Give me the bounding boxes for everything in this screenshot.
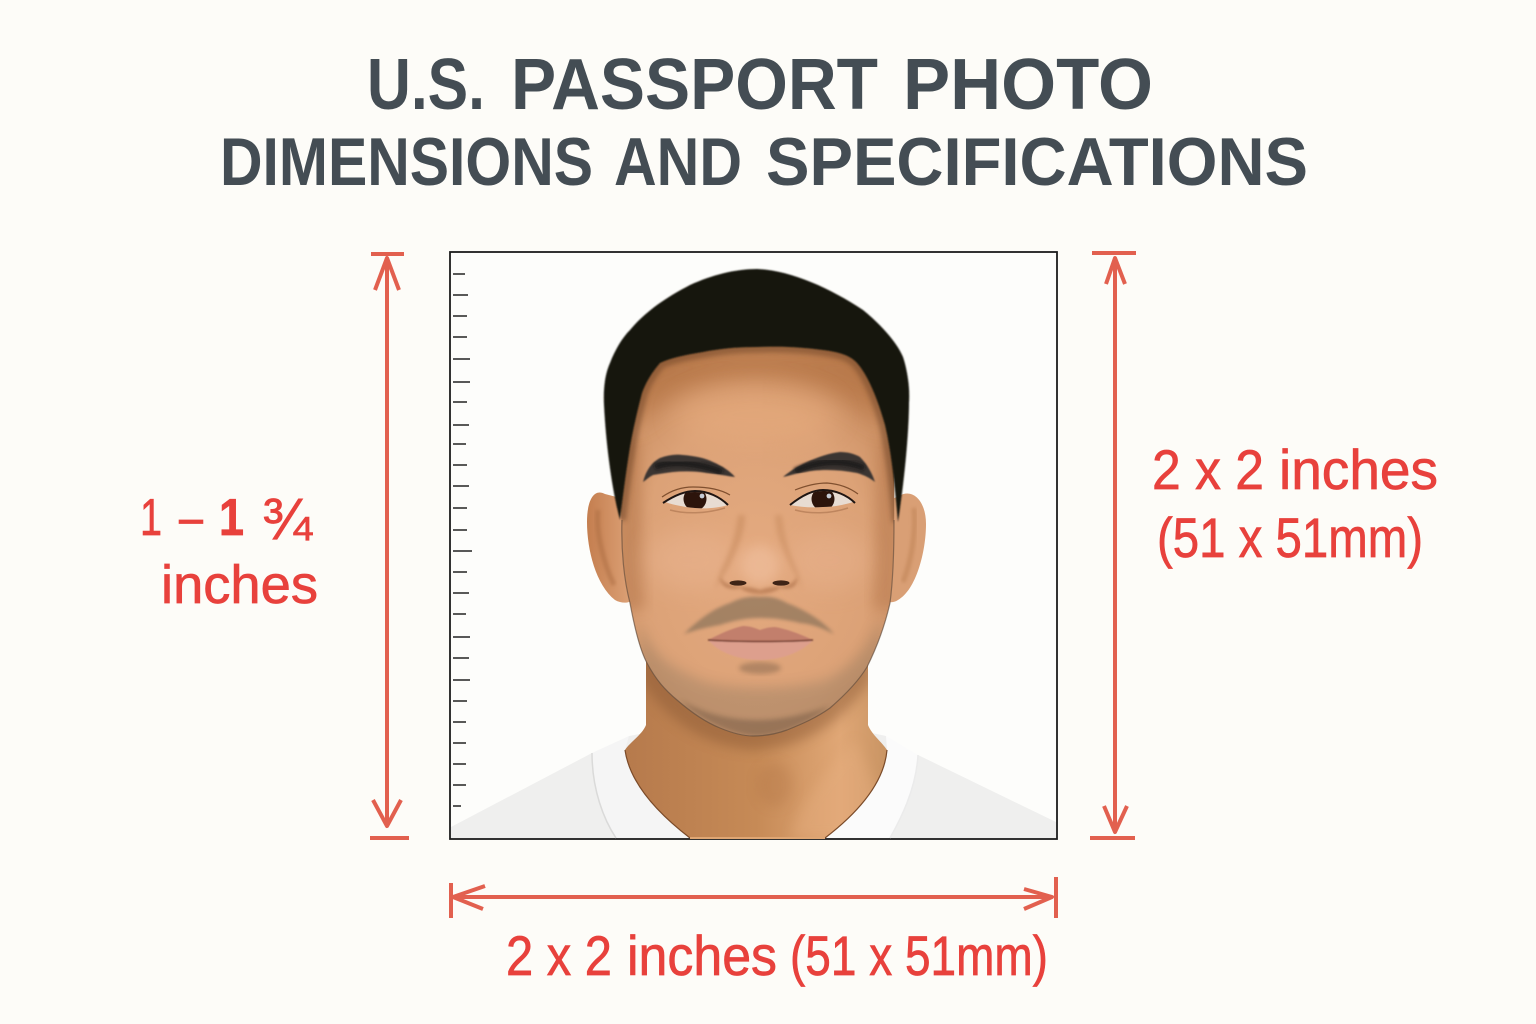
title: U.S. [367, 45, 485, 125]
label: left height [140, 487, 318, 615]
label: bottom width [506, 924, 1048, 987]
hair [604, 269, 909, 522]
label: right height: 2 x 2 [1152, 438, 1264, 501]
label: left height: inches [161, 555, 318, 615]
arrow: bottom width [451, 877, 1056, 918]
title: PASSPORT [511, 45, 878, 125]
jaw outline [622, 520, 894, 736]
mouth [708, 626, 813, 660]
face shading [618, 345, 898, 745]
label: left height: ¾ [262, 487, 313, 552]
label: bottom width: (51 x 51mm) [790, 924, 1048, 987]
panel: passport photo [140, 252, 1438, 987]
face [621, 346, 895, 737]
right eyebrow [783, 452, 875, 482]
title: DIMENSIONS [220, 124, 593, 200]
title: AND [614, 124, 742, 200]
title: PHOTO [903, 45, 1153, 125]
neck [625, 650, 887, 838]
label: right height [1152, 438, 1438, 569]
label: left height: – [179, 489, 203, 547]
nose [715, 515, 803, 594]
label: left height: 1 [140, 489, 162, 547]
ruler ticks [453, 274, 472, 806]
title: SPECIFICATIONS [766, 124, 1308, 200]
shirt [451, 733, 1056, 838]
left eye [662, 487, 730, 513]
left eyebrow [643, 455, 735, 482]
right eye [790, 483, 858, 513]
right ear [884, 494, 926, 602]
label: right height: inches [1279, 438, 1438, 501]
label: bottom width: 2 x 2 [506, 924, 612, 987]
stubble [684, 597, 834, 634]
label: right height: (51 x 51mm) [1157, 506, 1423, 569]
hairline shadow [620, 347, 898, 522]
label: bottom width: inches [627, 924, 777, 987]
arrow: right height [1090, 253, 1136, 838]
arrow: left height [370, 254, 409, 838]
label: left height: 1 [219, 489, 244, 547]
left ear [587, 492, 632, 603]
title [220, 45, 1308, 200]
